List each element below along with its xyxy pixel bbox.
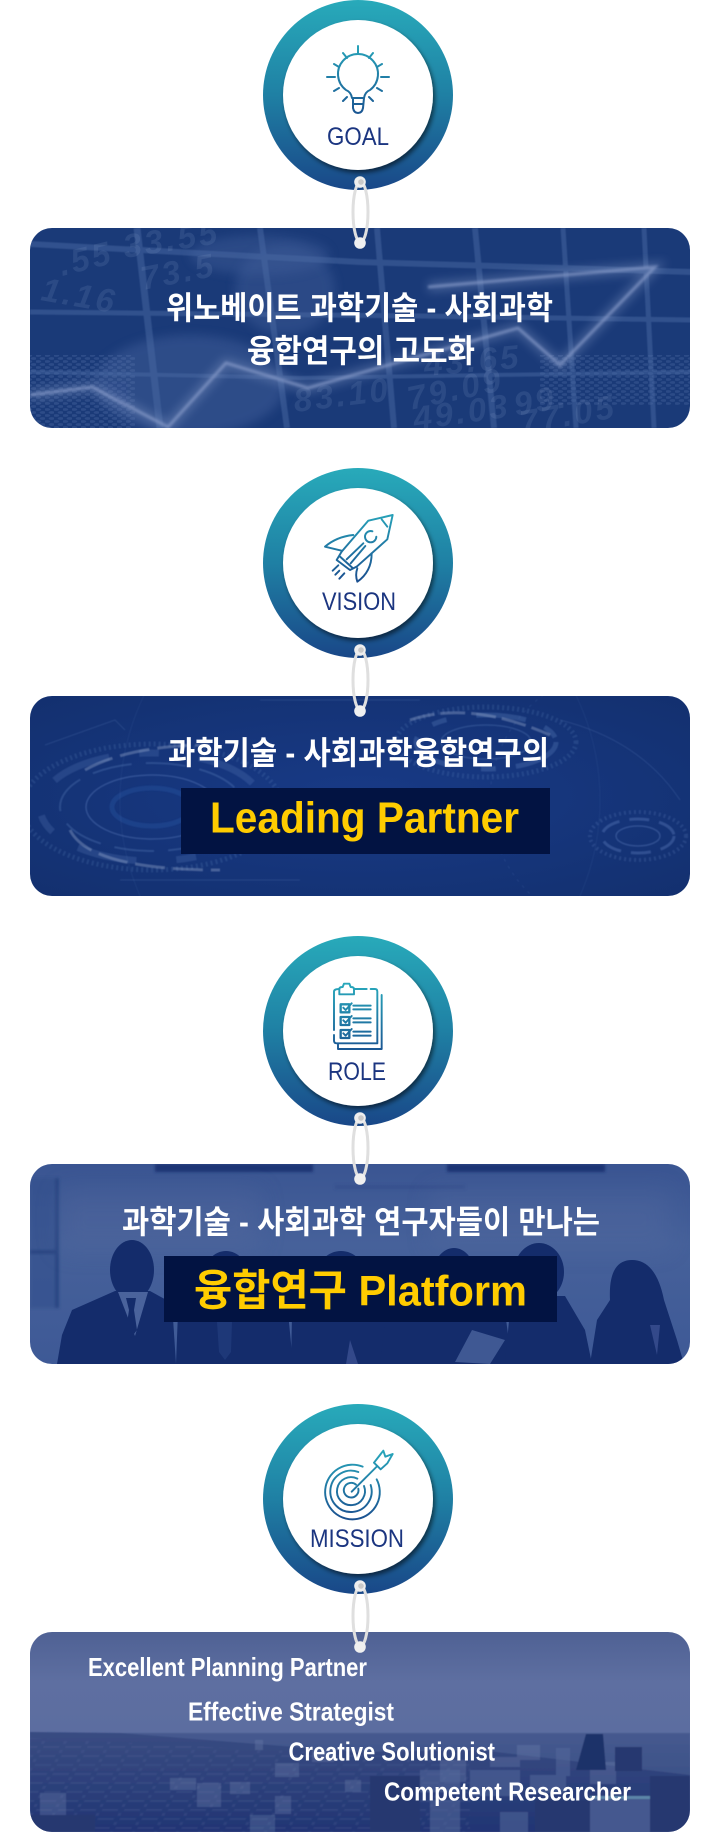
- connector: role ring: [353, 1112, 368, 1185]
- list: mission phrases: Excellent Planning Partner: [88, 1652, 367, 1682]
- card: goal statement: 1.16: [39, 270, 120, 320]
- card: goal statement: 33.55: [120, 213, 222, 265]
- icon: light bulb: [327, 46, 389, 113]
- section: mission: [30, 1404, 690, 1832]
- list: mission phrases: Creative Solutionist: [288, 1736, 495, 1766]
- label: mission: MISSION: [310, 1525, 404, 1553]
- heading: goal text: [166, 290, 553, 369]
- highlight box: Leading Partner: [181, 788, 550, 854]
- card: vision statement: [22, 560, 720, 1040]
- card: goal statement: 49.03: [410, 387, 513, 437]
- heading: role text: 과학기술 - 사회과학 연구자들이 만나는: [122, 1204, 600, 1240]
- card: goal statement: 83.10: [291, 370, 393, 419]
- heading: goal text: 위노베이트 과학기술 - 사회과학: [166, 290, 553, 326]
- card: goal statement: 79.09: [404, 360, 507, 417]
- icon: clipboard checklist: [334, 984, 382, 1049]
- connector: vision ring: [353, 644, 368, 717]
- heading: goal text: 융합연구의 고도화: [247, 333, 475, 369]
- badge: goal: [263, 0, 453, 190]
- section: role: [30, 936, 690, 1364]
- label: goal: GOAL: [327, 123, 389, 151]
- card: mission statement: [30, 1632, 690, 1832]
- card: goal statement: [30, 228, 690, 428]
- heading: vision text: 과학기술 - 사회과학융합연구의: [168, 735, 549, 771]
- badge: mission: [263, 1404, 453, 1594]
- connector: mission ring: [353, 1580, 368, 1653]
- connector: goal ring: [353, 176, 368, 249]
- section: goal: [30, 0, 695, 441]
- card: goal statement: .55: [55, 234, 117, 283]
- label: vision: VISION: [322, 588, 396, 616]
- highlight box: platform: [164, 1256, 557, 1322]
- label: role: ROLE: [328, 1058, 386, 1086]
- card: goal statement: 73.5: [137, 246, 219, 297]
- badge: role: [263, 936, 453, 1126]
- highlight box: platform: 융합연구 Platform: [194, 1268, 527, 1316]
- list: mission phrases: Competent Researcher: [384, 1776, 631, 1806]
- icon: rocket: [325, 515, 393, 582]
- icon: target with arrow: [325, 1451, 393, 1519]
- card: goal statement: 99.: [511, 377, 571, 423]
- highlight box: Leading Partner: Leading Partner: [210, 794, 519, 842]
- badge: vision: [263, 468, 453, 658]
- list: mission phrases: [88, 1652, 631, 1806]
- list: mission phrases: Effective Strategist: [188, 1696, 394, 1726]
- section: vision: [30, 468, 690, 896]
- card: goal statement: 43.65: [421, 338, 523, 383]
- card: goal statement: 77.05: [517, 388, 619, 441]
- card: role statement: [30, 1164, 690, 1364]
